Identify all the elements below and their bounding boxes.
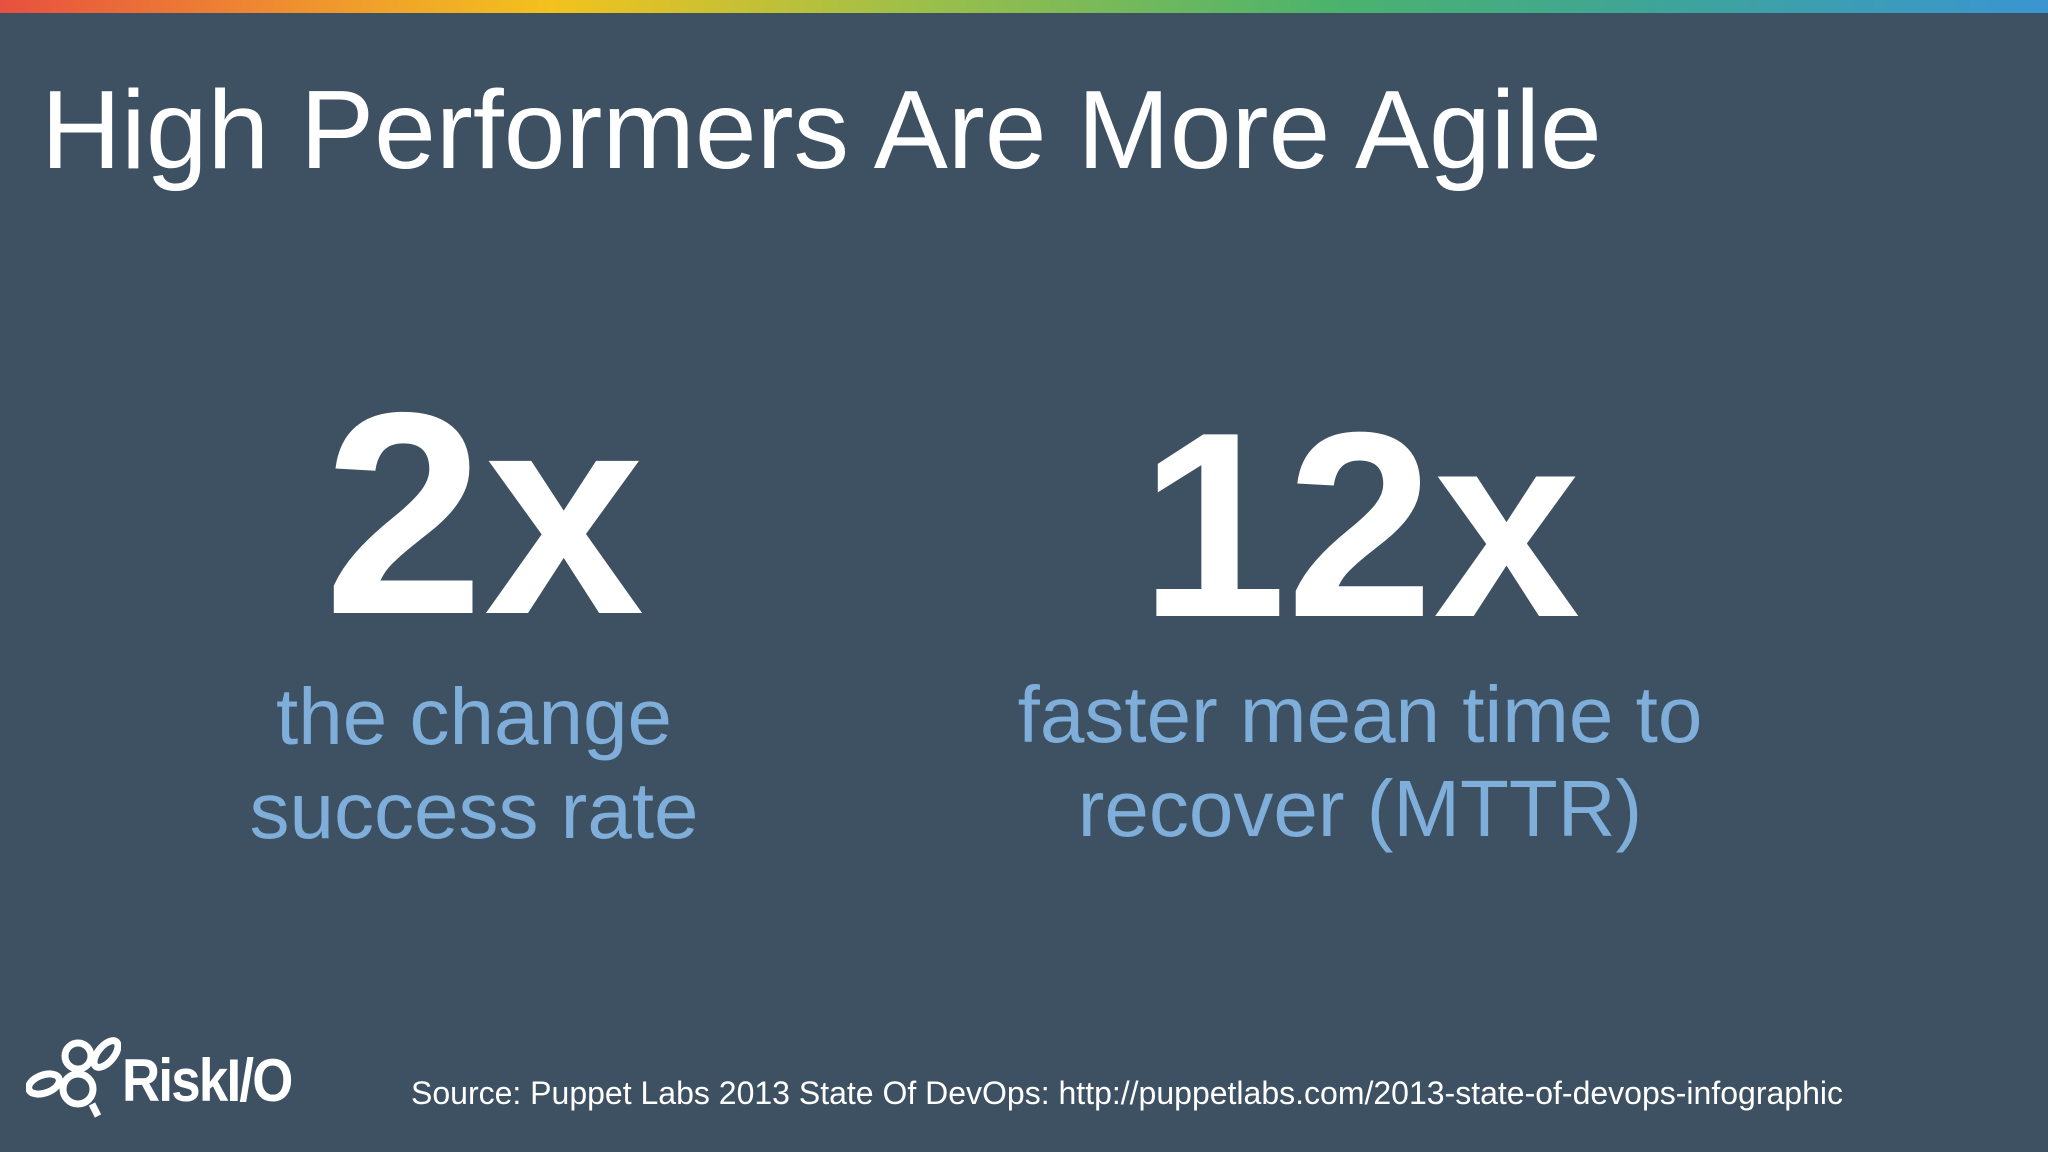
logo: Risk I/O [26,1037,292,1118]
top rainbow bar [0,0,2048,13]
label: change success rate: success rate [249,766,699,855]
label: MTTR: faster mean time to [1018,670,1702,759]
label: change success rate [249,672,699,855]
label: change success rate: the change [276,672,672,761]
label: MTTR: recover (MTTR) [1078,764,1642,853]
source text: Source: Puppet Labs 2013 State Of DevOps: http://puppetlabs.com/2013-state-of-devops-infographic [411,1075,1843,1111]
number 12x: 12x [1140,377,1580,672]
number 2x: 2x [324,353,644,675]
logo text: RiskI/O [122,1047,292,1114]
label: MTTR [1018,670,1702,853]
title: High Performers Are More Agile [41,68,1602,192]
icon: logo mark [26,1037,121,1118]
